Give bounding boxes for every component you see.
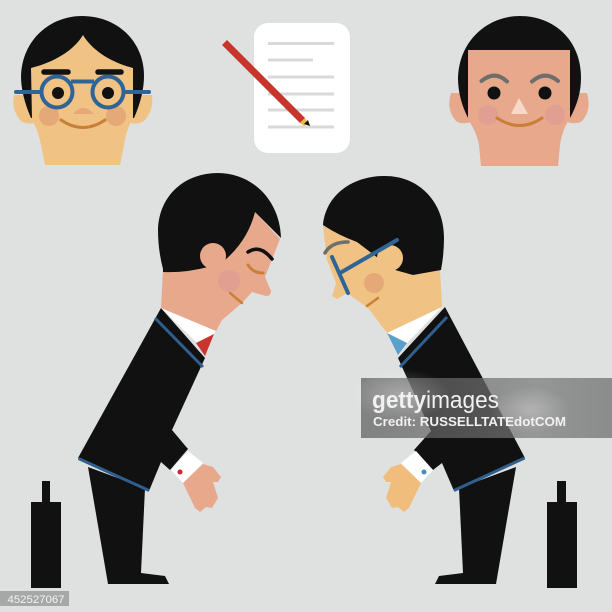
ear bbox=[377, 245, 403, 271]
document with pencil bbox=[222, 23, 350, 153]
pencil bbox=[222, 40, 310, 126]
blue tie bbox=[387, 333, 407, 355]
hand bbox=[183, 464, 221, 512]
glasses bbox=[16, 76, 149, 108]
image id badge: 452527067 bbox=[8, 594, 64, 606]
jacket bbox=[398, 307, 525, 491]
hair bbox=[323, 176, 444, 275]
left bowing businessman bbox=[78, 173, 281, 584]
ears bbox=[449, 93, 589, 123]
eyes bbox=[488, 86, 552, 100]
eyebrows bbox=[44, 69, 121, 75]
nose bbox=[73, 108, 94, 114]
right bowing businessman bbox=[323, 176, 525, 584]
ears bbox=[13, 95, 152, 124]
shirt cuff bbox=[171, 451, 203, 483]
cheeks bbox=[39, 106, 126, 126]
watermark logo: gettyimages bbox=[372, 387, 499, 414]
watermark bbox=[350, 369, 612, 438]
mouth bbox=[230, 293, 242, 303]
watermark credit: Credit: RUSSELLTATEdotCOM bbox=[373, 414, 566, 429]
closed eye bbox=[248, 249, 272, 259]
neck and face bbox=[161, 212, 280, 333]
cheek bbox=[218, 270, 240, 292]
right bottle bbox=[547, 481, 577, 588]
face bbox=[468, 50, 570, 166]
cuff button bbox=[422, 470, 426, 474]
hair bbox=[458, 16, 581, 118]
legs bbox=[435, 467, 516, 584]
eyes bbox=[52, 87, 114, 99]
red tie bbox=[196, 334, 214, 356]
jacket blue trim bbox=[78, 318, 203, 490]
glasses bbox=[332, 240, 397, 293]
watermark band bbox=[350, 369, 612, 438]
paper bbox=[254, 23, 350, 153]
cheeks bbox=[478, 105, 565, 125]
shirt collar bbox=[161, 308, 216, 343]
eye crease bbox=[248, 265, 263, 273]
mouth bbox=[61, 120, 105, 128]
shirt collar bbox=[387, 307, 442, 343]
hair bbox=[158, 173, 281, 272]
hand bbox=[383, 464, 421, 512]
legs bbox=[88, 467, 169, 584]
jacket blue trim bbox=[400, 317, 524, 490]
eyebrow bbox=[325, 242, 348, 253]
image id badge bbox=[0, 591, 69, 606]
cheek bbox=[364, 273, 384, 293]
left bottle bbox=[31, 481, 61, 588]
ear bbox=[200, 243, 226, 269]
cuff button bbox=[178, 470, 182, 474]
neck and face bbox=[323, 225, 442, 333]
text lines bbox=[268, 44, 334, 127]
portrait: man with glasses bbox=[13, 16, 152, 165]
mouth bbox=[367, 298, 378, 306]
face bbox=[31, 35, 133, 165]
eyebrows bbox=[482, 76, 558, 82]
portrait: man without glasses bbox=[449, 16, 589, 166]
mouth bbox=[497, 118, 542, 126]
hair bbox=[21, 16, 144, 118]
jacket bbox=[78, 308, 205, 491]
nose bbox=[511, 98, 528, 114]
shirt cuff bbox=[401, 451, 433, 483]
